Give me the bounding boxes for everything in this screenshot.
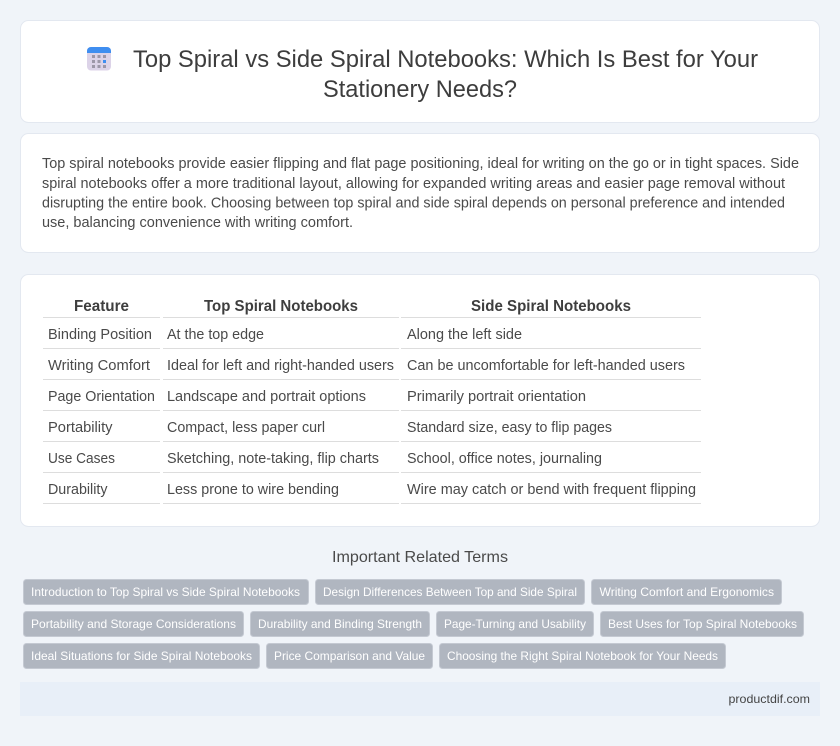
related term tags: Choosing the Right Spiral Notebook for Your Needs bbox=[447, 649, 718, 663]
row: portability: Standard size, easy to flip pages bbox=[407, 420, 612, 436]
row: binding position bbox=[48, 327, 522, 343]
row: use cases bbox=[48, 451, 602, 467]
table header: Top Spiral Notebooks bbox=[204, 298, 358, 315]
related term tags: Best Uses for Top Spiral Notebooks bbox=[608, 617, 797, 631]
row: page orientation: Page Orientation bbox=[48, 389, 155, 405]
related term tags: Portability and Storage Considerations bbox=[31, 617, 236, 631]
row: use cases: Sketching, note-taking, flip charts bbox=[167, 451, 379, 467]
related term tags: Writing Comfort and Ergonomics bbox=[600, 585, 774, 599]
row: durability: Durability bbox=[48, 482, 108, 498]
title: Stationery Needs? bbox=[323, 76, 517, 103]
table header bbox=[74, 298, 631, 315]
row: writing comfort: Writing Comfort bbox=[48, 358, 150, 374]
row: durability: Less prone to wire bending bbox=[167, 482, 339, 498]
heading: important related terms: Important Related Terms bbox=[332, 549, 508, 566]
row: binding position: Binding Position bbox=[48, 327, 152, 343]
related term tags: Ideal Situations for Side Spiral Notebooks bbox=[31, 649, 252, 663]
text block: summary: spiral notebooks offer a more traditional layout, allowing for expanded writing areas and easier page removal without bbox=[42, 176, 785, 192]
panel: comparison table bbox=[20, 274, 820, 526]
panel: header bbox=[20, 20, 820, 122]
row: portability: Compact, less paper curl bbox=[167, 420, 325, 436]
icon: calendar notebook bbox=[87, 47, 111, 70]
row: writing comfort bbox=[48, 358, 685, 374]
row: writing comfort: Ideal for left and right-handed users bbox=[167, 358, 394, 374]
row: durability: Wire may catch or bend with frequent flipping bbox=[407, 482, 696, 498]
row: portability: Portability bbox=[48, 420, 113, 436]
footer bar bbox=[20, 682, 820, 716]
row: page orientation: Primarily portrait orientation bbox=[407, 389, 586, 405]
related term tags bbox=[24, 580, 804, 668]
row: writing comfort: Can be uncomfortable for left-handed users bbox=[407, 358, 685, 374]
panel: summary paragraph bbox=[20, 134, 820, 252]
table header: Side Spiral Notebooks bbox=[471, 298, 631, 315]
row: use cases: School, office notes, journaling bbox=[407, 451, 602, 467]
related term tags: Design Differences Between Top and Side Spiral bbox=[323, 585, 577, 599]
related term tags: Price Comparison and Value bbox=[274, 649, 425, 663]
row: durability bbox=[48, 482, 696, 498]
title: Top Spiral vs Side Spiral Notebooks: Which Is Best for Your bbox=[133, 46, 758, 73]
related term tags: Page-Turning and Usability bbox=[444, 617, 586, 631]
row: page orientation: Landscape and portrait options bbox=[167, 389, 366, 405]
text block: summary: use, balancing convenience with writing comfort. bbox=[42, 215, 353, 231]
row: portability bbox=[48, 420, 612, 436]
table header: Feature bbox=[74, 298, 129, 315]
text block: summary: Top spiral notebooks provide easier flipping and flat page positioning, ideal for writing on the go or in tight spaces. Side bbox=[42, 156, 799, 172]
related term tags: Introduction to Top Spiral vs Side Spiral Notebooks bbox=[31, 585, 300, 599]
row: use cases: Use Cases bbox=[48, 451, 115, 467]
row: binding position: Along the left side bbox=[407, 327, 522, 343]
footer bar: productdif.com bbox=[728, 692, 810, 706]
text block: summary: disrupting the entire book. Choosing between top spiral and side spiral depends on personal preference and intended bbox=[42, 196, 785, 212]
text block: summary bbox=[42, 156, 799, 231]
related term tags: Durability and Binding Strength bbox=[258, 617, 422, 631]
title bbox=[133, 46, 758, 103]
row: binding position: At the top edge bbox=[167, 327, 264, 343]
row: page orientation bbox=[48, 389, 586, 405]
